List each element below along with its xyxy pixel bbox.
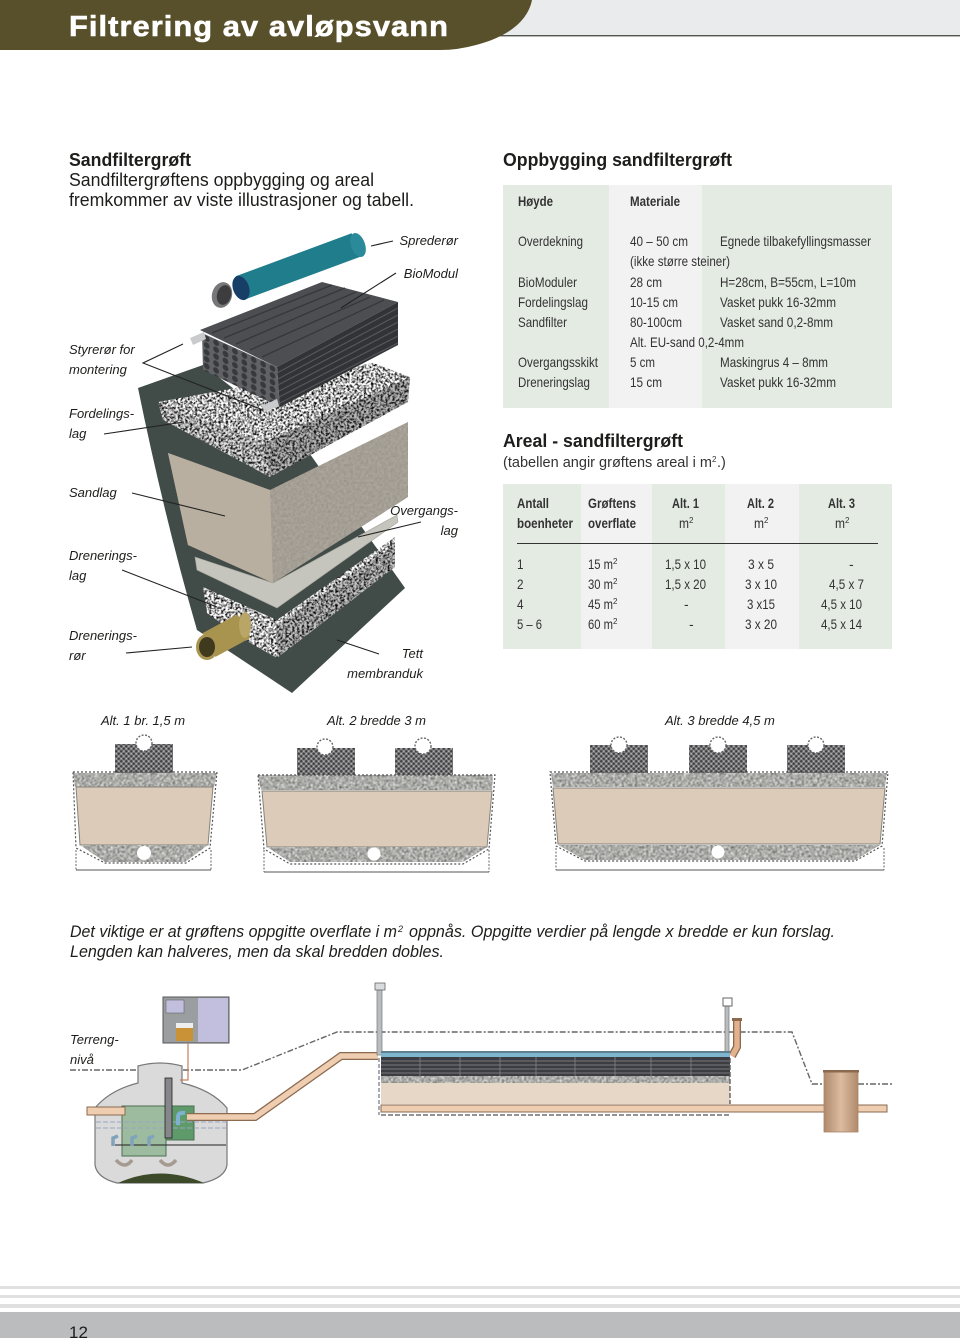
note text: oppnås. Oppgitte verdier på lengde x bredde er kun forslag. — [409, 923, 835, 941]
callout labels for the layers — [69, 233, 459, 681]
table: area of the sand filter trench: boenheter — [517, 515, 573, 531]
table: area of the sand filter trench: 1,5 x 10 — [665, 556, 706, 572]
table: area of the sand filter trench: m — [679, 515, 689, 531]
header band — [0, 0, 960, 50]
heading: area table: Areal - sandfiltergrøft — [503, 431, 683, 451]
heading: area table — [503, 431, 726, 471]
callout labels for the layers: Styrerør for — [69, 342, 135, 357]
table: area of the sand filter trench: - — [689, 616, 694, 632]
table: area of the sand filter trench: 2 — [613, 617, 618, 626]
table: area of the sand filter trench: 45 m — [588, 596, 613, 612]
intro text block: Sandfiltergrøft — [69, 150, 191, 170]
table: structure of the sand filter trench: Fordelingslag — [518, 294, 588, 310]
table: area of the sand filter trench: 30 m — [588, 576, 613, 592]
system diagram: tank, filter and outlet — [70, 983, 892, 1183]
table: structure of the sand filter trench: Alt. EU-sand 0,2-4mm — [630, 334, 744, 350]
callout labels for the layers: Overgangs- — [390, 503, 459, 518]
inlet and outlet pipes — [87, 1056, 378, 1117]
vent pipes — [375, 983, 742, 1056]
callout labels for the layers: lag — [69, 426, 87, 441]
table: area of the sand filter trench: 3 x 10 — [745, 576, 777, 592]
heading: structure table: Oppbygging sandfiltergrøft — [503, 150, 732, 170]
intro text block — [69, 150, 414, 210]
septic tank — [95, 1063, 227, 1183]
terrain line — [70, 1032, 892, 1084]
terrain label: Terreng- — [70, 1032, 119, 1047]
BioModul block — [190, 282, 398, 412]
table: area of the sand filter trench: Grøftens — [588, 495, 636, 511]
table: structure of the sand filter trench: 40 – 50 cm — [630, 233, 688, 249]
spreader pipe — [229, 231, 369, 302]
table: area of the sand filter trench: Alt. 3 — [828, 495, 855, 511]
table: area of the sand filter trench: 1 — [517, 556, 524, 572]
table: structure of the sand filter trench: (ikke større steiner) — [630, 253, 730, 269]
footer stripes — [0, 1286, 960, 1338]
table: structure of the sand filter trench: 5 cm — [630, 354, 655, 370]
table: area of the sand filter trench: - — [684, 596, 689, 612]
table: area of the sand filter trench: Alt. 2 — [747, 495, 774, 511]
table: area of the sand filter trench: 2 — [689, 516, 694, 525]
table: structure of the sand filter trench: Dreneringslag — [518, 374, 590, 390]
table: area of the sand filter trench: 2 — [517, 576, 524, 592]
callout labels for the layers: Drenerings- — [69, 628, 138, 643]
outlet pipe and well — [381, 1070, 887, 1132]
cross section: alternative 2: Alt. 2 bredde 3 m — [326, 713, 426, 728]
title: Filtrering av avløpsvann — [69, 11, 449, 43]
table: area of the sand filter trench: 5 – 6 — [517, 616, 542, 632]
table: area of the sand filter trench — [503, 484, 892, 649]
table: area of the sand filter trench: m — [754, 515, 764, 531]
table: structure of the sand filter trench: Sandfilter — [518, 314, 567, 330]
table: area of the sand filter trench: 4,5 x 14 — [821, 616, 862, 632]
cross section: alternative 3 — [550, 713, 888, 870]
heading: area table: 2 — [712, 455, 717, 464]
terrain label: nivå — [70, 1052, 94, 1067]
intro text block: fremkommer av viste illustrasjoner og tabell. — [69, 190, 414, 210]
callout labels for the layers: Tett — [402, 646, 424, 661]
table: area of the sand filter trench: 15 m — [588, 556, 613, 572]
heading: area table: (tabellen angir grøftens areal i m — [503, 455, 712, 471]
table: structure of the sand filter trench: 28 cm — [630, 274, 662, 290]
table: structure of the sand filter trench: 15 cm — [630, 374, 662, 390]
table: area of the sand filter trench: 2 — [613, 597, 618, 606]
table: area of the sand filter trench: 2 — [613, 557, 618, 566]
note text: Det viktige er at grøftens oppgitte overflate i m — [70, 923, 397, 941]
table: area of the sand filter trench: 4,5 x 10 — [821, 596, 862, 612]
table: structure of the sand filter trench: Maskingrus 4 – 8mm — [720, 354, 828, 370]
callout labels for the layers: lag — [441, 523, 459, 538]
table: structure of the sand filter trench: Overgangsskikt — [518, 354, 598, 370]
note text: 2 — [397, 924, 403, 934]
sand filter cross section — [379, 1051, 730, 1115]
table: structure of the sand filter trench: Egnede tilbakefyllingsmasser — [720, 233, 871, 249]
callout labels for the layers: Sandlag — [69, 485, 117, 500]
callout labels for the layers: rør — [69, 648, 86, 663]
table: area of the sand filter trench: m — [835, 515, 845, 531]
table: structure of the sand filter trench: Vasket sand 0,2-8mm — [720, 314, 833, 330]
transition layer plate — [195, 515, 398, 608]
callout labels for the layers: Fordelings- — [69, 406, 135, 421]
callout labels for the layers: membranduk — [347, 666, 424, 681]
table: structure of the sand filter trench — [503, 185, 892, 408]
table: area of the sand filter trench: 1,5 x 20 — [665, 576, 706, 592]
callout labels for the layers: Sprederør — [399, 233, 459, 248]
table: area of the sand filter trench: 4 — [517, 596, 524, 612]
table: structure of the sand filter trench: Høyde — [518, 193, 553, 209]
end cap ring — [209, 280, 235, 310]
table: area of the sand filter trench: 3 x 20 — [745, 616, 777, 632]
cross section: alternative 1: Alt. 1 br. 1,5 m — [100, 713, 185, 728]
callout labels for the layers: BioModul — [404, 266, 459, 281]
table: area of the sand filter trench: Alt. 1 — [672, 495, 699, 511]
cross section: alternative 1 — [73, 713, 217, 870]
heading: area table: .) — [717, 455, 726, 471]
table: structure of the sand filter trench: 80-100cm — [630, 314, 682, 330]
table: structure of the sand filter trench: Materiale — [630, 193, 680, 209]
table: area of the sand filter trench: 4,5 x 7 — [829, 576, 864, 592]
table: structure of the sand filter trench: BioModuler — [518, 274, 577, 290]
exploded illustration: filter layers — [138, 231, 410, 693]
table: area of the sand filter trench: 2 — [613, 577, 618, 586]
intro text block: Sandfiltergrøftens oppbygging og areal — [69, 170, 374, 190]
cross section: alternative 3: Alt. 3 bredde 4,5 m — [664, 713, 775, 728]
table: area of the sand filter trench: 3 x15 — [747, 596, 775, 612]
control cabinet — [163, 997, 229, 1080]
table: structure of the sand filter trench: Vasket pukk 16-32mm — [720, 294, 836, 310]
table: structure of the sand filter trench: H=28cm, B=55cm, L=10m — [720, 274, 856, 290]
table: structure of the sand filter trench: Vasket pukk 16-32mm — [720, 374, 836, 390]
note text: Lengden kan halveres, men da skal bredden dobles. — [70, 943, 444, 961]
sand block — [168, 422, 408, 583]
lower gravel drainage layer — [203, 537, 395, 658]
cross section: alternative 2 — [258, 713, 495, 872]
note text — [70, 923, 835, 961]
table: area of the sand filter trench: 2 — [764, 516, 769, 525]
table: area of the sand filter trench: - — [849, 556, 854, 572]
table: area of the sand filter trench: 3 x 5 — [748, 556, 774, 572]
table: area of the sand filter trench: Antall — [517, 495, 549, 511]
terrain label — [70, 1032, 119, 1067]
table: structure of the sand filter trench: Overdekning — [518, 233, 583, 249]
membrane sheet — [138, 365, 405, 693]
callout labels for the layers: Drenerings- — [69, 548, 138, 563]
table: area of the sand filter trench: 60 m — [588, 616, 613, 632]
table: area of the sand filter trench: overflate — [588, 515, 636, 531]
table: area of the sand filter trench: 2 — [845, 516, 850, 525]
callout labels for the layers: montering — [69, 362, 128, 377]
drain pipe — [196, 612, 251, 660]
upper gravel distribution layer — [158, 363, 410, 477]
callout labels for the layers: lag — [69, 568, 87, 583]
table: structure of the sand filter trench: 10-15 cm — [630, 294, 678, 310]
